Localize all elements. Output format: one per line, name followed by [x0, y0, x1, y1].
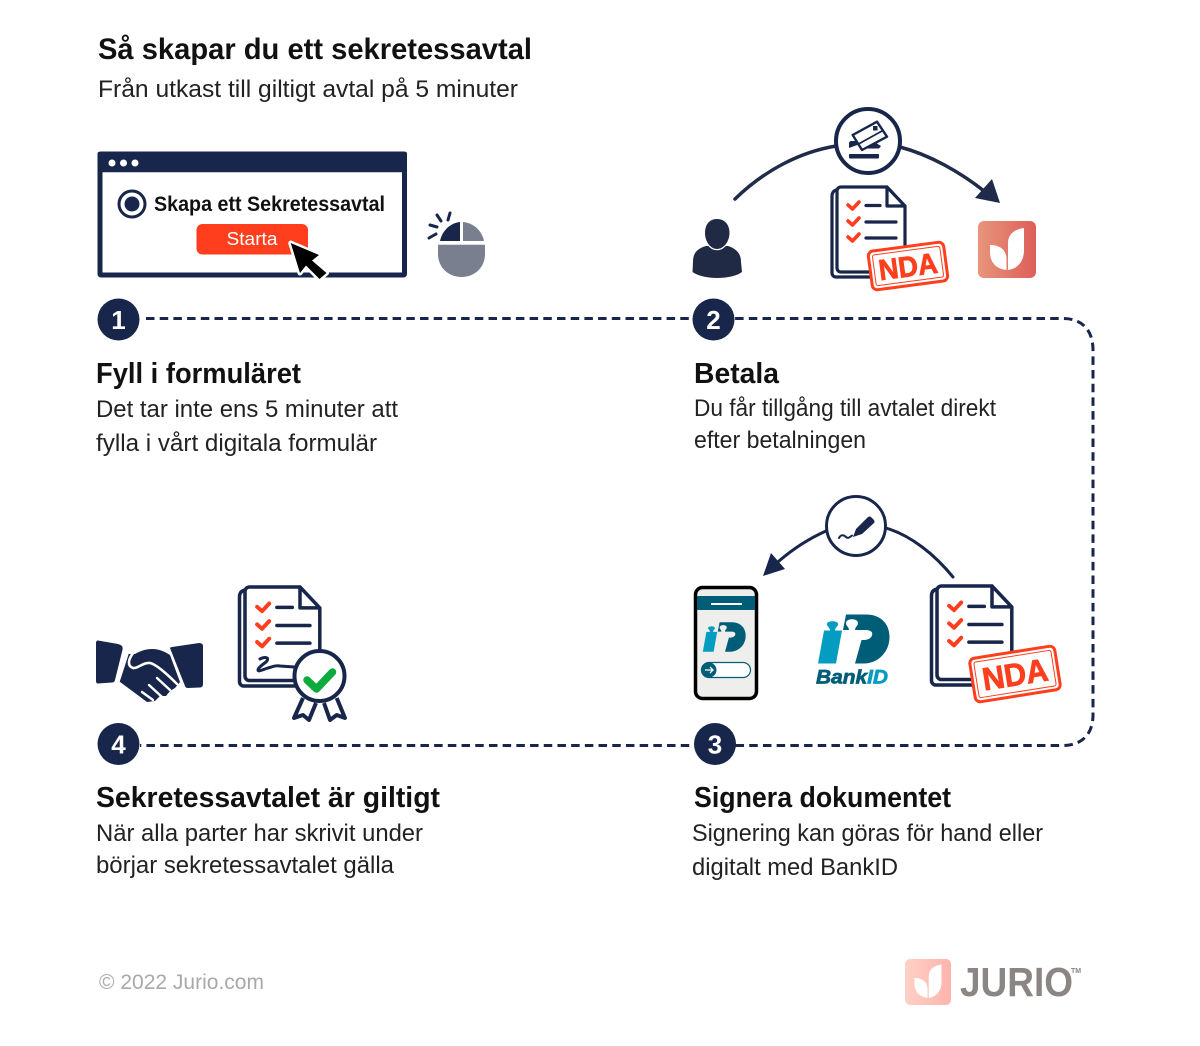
footer logo [905, 959, 1081, 1005]
start button [196, 224, 308, 254]
browser window [100, 154, 404, 275]
step 4 text: Sekretessavtalet är giltigt [96, 782, 440, 814]
step marker 1: 1 [111, 305, 126, 335]
icon: phone with BankID [696, 588, 756, 698]
step 3 text: digitalt med BankID [692, 854, 898, 881]
illustration: form window [98, 152, 407, 279]
step 3 text: Signering kan göras för hand eller [692, 820, 1043, 847]
icon: pen signature [826, 496, 886, 556]
step 2 text: Du får tillgång till avtalet direkt [694, 395, 996, 422]
icon: mouse click [429, 213, 485, 277]
step 2 text: Betala [694, 358, 780, 390]
signed document [240, 587, 320, 686]
form label: Skapa ett Sekretessavtal [154, 193, 385, 216]
icon: person [692, 219, 742, 278]
NDA document [832, 187, 948, 290]
step 4 text: börjar sekretessavtalet gälla [96, 852, 395, 879]
footer logo: TM [1071, 968, 1081, 975]
icon: Jurio logo [978, 221, 1036, 278]
title: Så skapar du ett sekretessavtal [98, 33, 532, 66]
illustration: signed agreement [96, 587, 345, 720]
step marker 4: 4 [111, 730, 126, 760]
step marker 3 [694, 723, 736, 765]
step 4 text [96, 782, 440, 879]
icon: credit cards [836, 109, 900, 173]
copyright: © 2022 Jurio.com [99, 971, 264, 994]
step marker 3: 3 [708, 730, 722, 760]
step marker 4 [98, 723, 140, 765]
step 3 text: Signera dokumentet [694, 782, 951, 814]
step 1 text: Det tar inte ens 5 minuter att [96, 396, 398, 423]
subtitle: Från utkast till giltigt avtal på 5 minuter [98, 76, 518, 103]
arrowhead [975, 179, 1000, 203]
dashed process path [140, 318, 1093, 746]
step marker 2: 2 [706, 305, 721, 335]
step 1 text: Fyll i formuläret [96, 358, 301, 390]
NDA stamp: NDA [877, 248, 940, 287]
cursor [291, 243, 326, 279]
start button: Starta [226, 229, 279, 249]
step 2 text: efter betalningen [694, 427, 866, 454]
illustration: signing flow [696, 496, 1061, 702]
step marker 1 [98, 298, 140, 340]
icon: handshake [96, 640, 203, 702]
NDA document [932, 586, 1061, 702]
ribbon seal [294, 651, 345, 720]
step 1 text [96, 358, 398, 457]
NDA stamp: NDA [980, 652, 1050, 697]
BankID logo: BankID [816, 668, 888, 688]
step 3 text [692, 782, 1043, 881]
step 4 text: När alla parter har skrivit under [96, 820, 423, 847]
step 1 text: fylla i vårt digitala formulär [96, 430, 377, 457]
BankID logo [816, 614, 890, 688]
arrowhead [763, 553, 785, 576]
radio button [119, 191, 145, 217]
arc from person to Jurio [735, 146, 984, 199]
step marker 2 [692, 298, 734, 340]
footer logo: JURIO [960, 959, 1073, 1005]
illustration: payment flow [692, 109, 1036, 290]
step 2 text [694, 358, 996, 454]
arc from document to phone [779, 528, 953, 577]
